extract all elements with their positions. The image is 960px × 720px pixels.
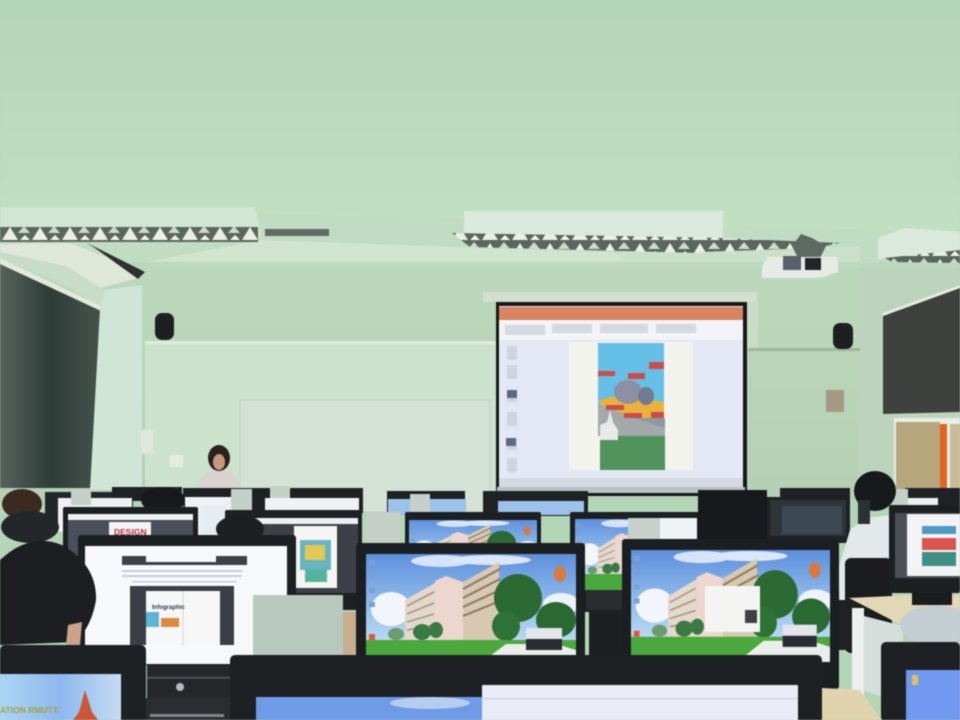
black chair	[838, 558, 892, 653]
black speaker between monitors	[586, 590, 622, 662]
dark wall panel right	[883, 285, 960, 414]
large monitor wallpaper right	[622, 539, 839, 689]
ceiling light right	[878, 228, 960, 263]
whiteboard	[240, 400, 490, 512]
desk card large	[253, 595, 357, 665]
monitor right: colourful poster	[889, 505, 960, 605]
large monitor with web page	[78, 535, 296, 720]
slide page	[569, 342, 693, 470]
dark monitor	[698, 490, 767, 542]
slide thumbnails	[507, 346, 517, 472]
large monitor wallpaper centre	[356, 543, 585, 668]
wall control box	[826, 390, 844, 412]
monitor: poster page	[225, 510, 362, 610]
screen frame	[496, 302, 747, 496]
poster on slide	[598, 343, 665, 470]
speaker right	[833, 323, 853, 349]
desk card	[366, 512, 400, 542]
monitor: back row wallpaper 1	[405, 512, 541, 580]
embedded document viewer	[130, 586, 234, 645]
monitor: back row wallpaper 2	[570, 512, 702, 612]
grey cloth right	[900, 605, 960, 645]
monitor: design page	[63, 507, 198, 557]
design label: DESIGN	[114, 527, 147, 537]
lower wall	[0, 262, 960, 500]
projector	[762, 234, 838, 278]
foreground monitor right	[881, 642, 960, 720]
status bar	[499, 478, 743, 487]
ceiling light left	[0, 207, 329, 242]
window curtain	[0, 258, 101, 488]
ceiling light centre	[452, 211, 840, 253]
open dialog note	[705, 586, 760, 632]
screen casing	[483, 292, 757, 302]
projection screen	[483, 292, 758, 496]
far row of monitors	[45, 487, 960, 537]
foreground monitor left	[0, 645, 146, 720]
monitor: dark software window	[767, 497, 850, 543]
student head far centre	[141, 487, 185, 513]
wall board	[145, 341, 860, 493]
power outlet	[141, 430, 183, 467]
student foreground left	[0, 541, 96, 645]
presenter	[198, 445, 241, 490]
student head back left	[1, 489, 59, 543]
air conditioner	[0, 243, 145, 308]
door right	[894, 418, 960, 492]
foreground monitor centre	[230, 655, 822, 720]
taskbar	[497, 487, 745, 493]
ceiling soffit	[0, 207, 960, 290]
wall column	[90, 285, 142, 490]
upper green wall	[0, 0, 960, 232]
right desk	[849, 595, 960, 705]
student head near poster monitor	[216, 515, 264, 543]
monitor stand	[147, 664, 231, 698]
foreground desk	[822, 688, 882, 720]
wallpaper heading: ATION RMUTT.	[0, 705, 59, 715]
student right	[838, 471, 896, 600]
infographic label: Infographic	[152, 605, 185, 611]
paper cards far row	[71, 486, 908, 512]
powerpoint title bar	[499, 307, 743, 320]
powerpoint ribbon	[499, 320, 743, 340]
speaker left	[155, 313, 174, 340]
